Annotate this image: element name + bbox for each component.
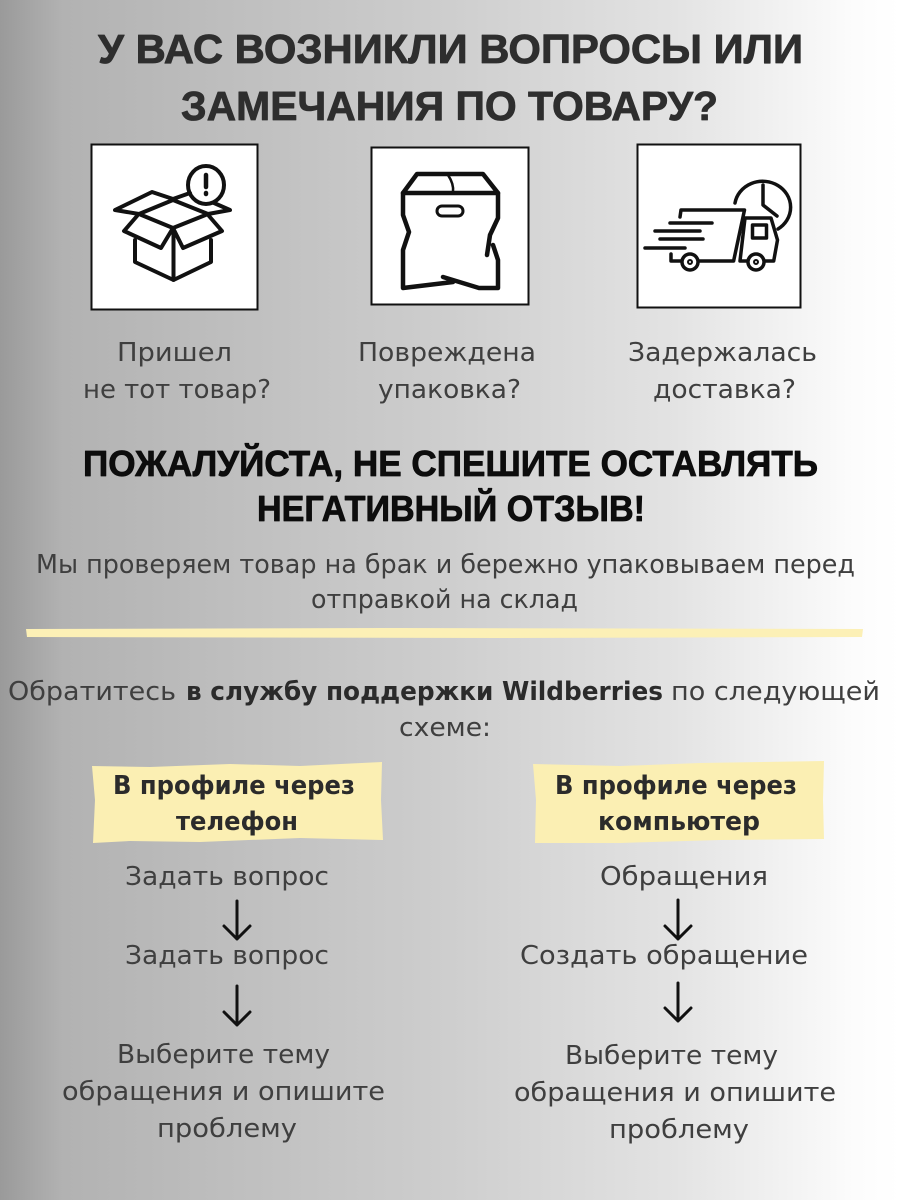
- heading: please do not leave a negative review: ПОЖАЛУЙСТА, НЕ СПЕШИТЕ ОСТАВЛЯТЬ: [83, 442, 818, 484]
- text block: quality statement: Мы проверяем товар на брак и бережно упаковываем перед: [36, 550, 855, 580]
- label: via phone: телефон: [176, 807, 298, 837]
- caption: delayed delivery: доставка?: [653, 375, 796, 405]
- heading: please do not leave a negative review: НЕГАТИВНЫЙ ОТЗЫВ!: [257, 487, 645, 529]
- title: У ВАС ВОЗНИКЛИ ВОПРОСЫ ИЛИ: [98, 26, 803, 72]
- steps: phone: проблему: [157, 1114, 297, 1144]
- icon: open box with exclamation mark: [92, 144, 258, 310]
- caption: wrong item: [83, 338, 271, 405]
- steps: computer: проблему: [609, 1115, 749, 1145]
- heading: please do not leave a negative review: [83, 442, 818, 529]
- caption: delayed delivery: [628, 338, 817, 405]
- text block: contact support: Обратитесь: [8, 677, 176, 707]
- steps: computer: [514, 862, 836, 1145]
- text block: contact support: схеме:: [399, 713, 491, 743]
- title: ЗАМЕЧАНИЯ ПО ТОВАРУ?: [181, 83, 718, 129]
- text block: quality statement: [36, 550, 855, 615]
- steps: phone: Выберите тему: [117, 1040, 330, 1070]
- label: via computer: компьютер: [598, 807, 760, 837]
- label: via phone: В профиле через: [113, 771, 355, 801]
- steps: phone: обращения и опишите: [62, 1077, 385, 1107]
- steps: phone: [62, 862, 385, 1144]
- caption: wrong item: Пришел: [117, 338, 232, 368]
- steps: phone: Задать вопрос: [125, 862, 329, 892]
- steps: computer: обращения и опишите: [514, 1078, 836, 1108]
- caption: delayed delivery: Задержалась: [628, 338, 817, 368]
- caption: damaged packaging: [358, 338, 536, 405]
- caption: damaged packaging: Повреждена: [358, 338, 536, 368]
- text block: quality statement: отправкой на склад: [311, 585, 578, 615]
- title: [98, 26, 803, 129]
- steps: phone: Задать вопрос: [125, 941, 329, 971]
- text block: contact support: по следующей: [671, 677, 880, 707]
- caption: wrong item: не тот товар?: [83, 375, 271, 405]
- icon: damaged package: [372, 148, 528, 304]
- label: via phone: [92, 762, 383, 843]
- divider: yellow bar: [26, 628, 863, 638]
- steps: computer: Выберите тему: [565, 1041, 778, 1071]
- caption: damaged packaging: упаковка?: [378, 375, 521, 405]
- steps: computer: Создать обращение: [520, 941, 808, 971]
- steps: computer: Обращения: [600, 862, 768, 892]
- text block: contact support: [8, 677, 880, 743]
- label: via computer: [533, 761, 824, 843]
- label: via computer: В профиле через: [555, 771, 797, 801]
- icon: delivery truck with clock: [638, 144, 800, 308]
- text block: contact support: в службу поддержки Wildberries: [186, 677, 663, 707]
